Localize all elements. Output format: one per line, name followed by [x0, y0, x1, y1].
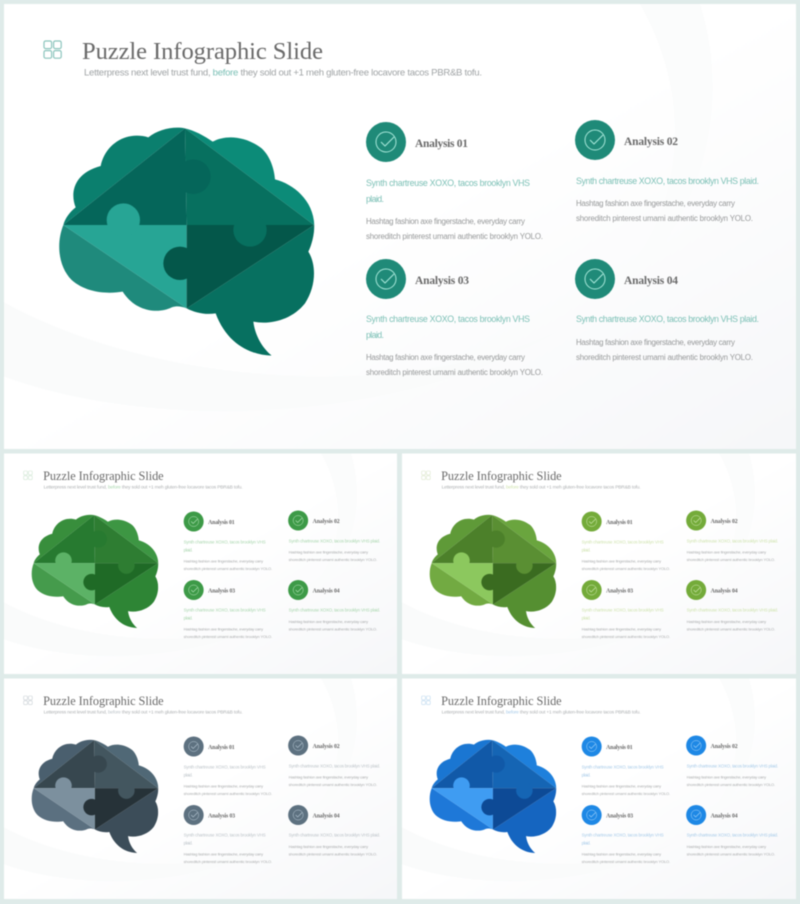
- item: analysis 03: plaid.: [582, 840, 591, 846]
- item: analysis 01: Synth chartreuse XOXO, tacos brooklyn VHS: [366, 178, 530, 188]
- item: analysis 03: Analysis 03: [606, 814, 633, 820]
- item: analysis 01: plaid.: [184, 548, 193, 552]
- icon: puzzle grid: [422, 696, 430, 705]
- item: analysis 02: Synth chartreuse XOXO, tacos brooklyn VHS plaid.: [687, 538, 778, 544]
- panel: dark slide: [1, 678, 397, 899]
- item: analysis 04: Analysis 04: [624, 275, 678, 287]
- brain puzzle graphic: [428, 739, 557, 854]
- item: analysis 01: Hashtag fashion axe fingerstache, everyday carry: [184, 784, 263, 788]
- item: analysis 03: [582, 580, 670, 639]
- item: analysis 03: Hashtag fashion axe fingerstache, everyday carry: [582, 626, 661, 632]
- item: analysis 04: Synth chartreuse XOXO, tacos brooklyn VHS plaid.: [687, 832, 778, 838]
- item: analysis 01: Synth chartreuse XOXO, tacos brooklyn VHS: [582, 540, 664, 544]
- item: analysis 04: Hashtag fashion axe fingerstache, everyday carry: [289, 844, 368, 849]
- item: analysis 03: [582, 805, 670, 864]
- item: analysis 04: Hashtag fashion axe fingerstache, everyday carry: [687, 844, 766, 849]
- item: analysis 01: shoreditch pinterest umami authentic brooklyn YOLO.: [366, 232, 543, 241]
- item: analysis 02: shoreditch pinterest umami authentic brooklyn YOLO.: [289, 557, 377, 562]
- item: analysis 02: Synth chartreuse XOXO, tacos brooklyn VHS plaid.: [289, 764, 380, 768]
- item: analysis 03: Analysis 03: [208, 588, 235, 594]
- item: analysis 01: Synth chartreuse XOXO, tacos brooklyn VHS: [184, 540, 266, 544]
- brain puzzle graphic: [58, 126, 315, 356]
- item: analysis 04: [288, 805, 380, 856]
- item: analysis 03: Synth chartreuse XOXO, tacos brooklyn VHS: [366, 314, 530, 324]
- item: analysis 02: Hashtag fashion axe fingerstache, everyday carry: [687, 774, 766, 780]
- item: analysis 02: Hashtag fashion axe fingerstache, everyday carry: [289, 550, 368, 554]
- item: analysis 02: shoreditch pinterest umami authentic brooklyn YOLO.: [687, 557, 775, 562]
- item: analysis 04: Analysis 04: [313, 814, 340, 820]
- item: analysis 03: [184, 580, 272, 639]
- item: analysis 01: Hashtag fashion axe fingerstache, everyday carry: [582, 784, 661, 788]
- item: analysis 03: Synth chartreuse XOXO, tacos brooklyn VHS: [184, 608, 266, 612]
- item: analysis 02: [575, 120, 759, 223]
- item: analysis 03: Hashtag fashion axe fingerstache, everyday carry: [366, 353, 525, 362]
- title: Puzzle Infographic Slide: [43, 694, 164, 708]
- item: analysis 02: Synth chartreuse XOXO, tacos brooklyn VHS plaid.: [576, 176, 759, 186]
- subtitle: Letterpress next level trust fund, before they sold out +1 meh gluten-free locavore tacos PBR&B tofu.: [44, 484, 243, 490]
- item: analysis 03: [366, 259, 543, 377]
- item: analysis 01: [582, 512, 670, 571]
- title: Puzzle Infographic Slide: [82, 38, 323, 65]
- item: analysis 03: Synth chartreuse XOXO, tacos brooklyn VHS: [582, 608, 664, 612]
- item: analysis 02: [288, 736, 380, 787]
- item: analysis 02: Analysis 02: [313, 519, 340, 525]
- item: analysis 01: [184, 736, 272, 796]
- item: analysis 04: [686, 805, 778, 856]
- item: analysis 02: Analysis 02: [711, 744, 738, 750]
- item: analysis 03: plaid.: [582, 616, 591, 620]
- panel: lime slide: [399, 452, 796, 674]
- item: analysis 01: [582, 736, 670, 796]
- item: analysis 01: Analysis 01: [415, 138, 468, 150]
- item: analysis 03: Analysis 03: [606, 588, 633, 594]
- brain puzzle graphic: [428, 514, 557, 629]
- item: analysis 01: plaid.: [582, 548, 591, 552]
- item: analysis 03: plaid.: [366, 330, 384, 340]
- item: analysis 04: Analysis 04: [711, 588, 738, 594]
- item: analysis 03: Analysis 03: [208, 814, 235, 820]
- item: analysis 02: shoreditch pinterest umami authentic brooklyn YOLO.: [289, 782, 377, 787]
- title: Puzzle Infographic Slide: [441, 469, 562, 483]
- item: analysis 01: Analysis 01: [606, 520, 633, 526]
- item: analysis 01: plaid.: [582, 772, 591, 778]
- title: Puzzle Infographic Slide: [43, 469, 164, 483]
- item: analysis 04: shoreditch pinterest umami authentic brooklyn YOLO.: [289, 626, 377, 632]
- item: analysis 01: Synth chartreuse XOXO, tacos brooklyn VHS: [184, 764, 266, 770]
- item: analysis 02: Analysis 02: [313, 744, 340, 750]
- item: analysis 03: Hashtag fashion axe fingerstache, everyday carry: [582, 852, 661, 856]
- title: Puzzle Infographic Slide: [441, 694, 562, 708]
- item: analysis 04: shoreditch pinterest umami authentic brooklyn YOLO.: [687, 626, 775, 632]
- item: analysis 03: Hashtag fashion axe fingerstache, everyday carry: [184, 626, 263, 632]
- subtitle: Letterpress next level trust fund, before they sold out +1 meh gluten-free locavore tacos PBR&B tofu.: [44, 709, 243, 715]
- item: analysis 03: Hashtag fashion axe fingerstache, everyday carry: [184, 852, 263, 856]
- item: analysis 02: Hashtag fashion axe fingerstache, everyday carry: [576, 199, 735, 208]
- item: analysis 02: Synth chartreuse XOXO, tacos brooklyn VHS plaid.: [687, 764, 778, 768]
- icon: puzzle grid: [422, 471, 430, 480]
- item: analysis 04: Analysis 04: [711, 814, 738, 820]
- item: analysis 03: shoreditch pinterest umami authentic brooklyn YOLO.: [582, 634, 670, 639]
- item: analysis 02: [686, 510, 778, 562]
- item: analysis 01: shoreditch pinterest umami authentic brooklyn YOLO.: [184, 566, 272, 571]
- item: analysis 01: Analysis 01: [208, 520, 235, 526]
- item: analysis 01: shoreditch pinterest umami authentic brooklyn YOLO.: [582, 566, 670, 571]
- item: analysis 04: shoreditch pinterest umami authentic brooklyn YOLO.: [289, 852, 377, 856]
- item: analysis 03: Synth chartreuse XOXO, tacos brooklyn VHS: [582, 832, 664, 838]
- item: analysis 02: Synth chartreuse XOXO, tacos brooklyn VHS plaid.: [289, 538, 380, 544]
- item: analysis 04: Hashtag fashion axe fingerstache, everyday carry: [289, 619, 368, 624]
- item: analysis 02: shoreditch pinterest umami authentic brooklyn YOLO.: [687, 782, 775, 787]
- item: analysis 03: shoreditch pinterest umami authentic brooklyn YOLO.: [184, 634, 272, 639]
- item: analysis 01: [184, 512, 272, 571]
- subtitle: Letterpress next level trust fund, before they sold out +1 meh gluten-free locavore tacos PBR&B tofu.: [84, 68, 482, 78]
- item: analysis 02: Analysis 02: [624, 136, 678, 148]
- item: analysis 04: Hashtag fashion axe fingerstache, everyday carry: [576, 338, 735, 347]
- icon: puzzle grid: [44, 41, 61, 58]
- item: analysis 01: [366, 122, 543, 241]
- item: analysis 04: [686, 580, 778, 632]
- item: analysis 03: [184, 805, 272, 864]
- item: analysis 03: shoreditch pinterest umami authentic brooklyn YOLO.: [582, 859, 670, 864]
- item: analysis 01: Analysis 01: [606, 745, 633, 751]
- item: analysis 04: Synth chartreuse XOXO, tacos brooklyn VHS plaid.: [687, 608, 778, 612]
- item: analysis 03: plaid.: [184, 840, 193, 846]
- item: analysis 03: shoreditch pinterest umami authentic brooklyn YOLO.: [366, 368, 543, 377]
- item: analysis 04: Analysis 04: [313, 588, 340, 594]
- item: analysis 03: Synth chartreuse XOXO, tacos brooklyn VHS: [184, 832, 266, 838]
- item: analysis 01: plaid.: [366, 194, 384, 204]
- item: analysis 02: [288, 510, 380, 562]
- item: analysis 01: Hashtag fashion axe fingerstache, everyday carry: [184, 558, 263, 564]
- item: analysis 04: Synth chartreuse XOXO, tacos brooklyn VHS plaid.: [289, 832, 380, 838]
- item: analysis 02: [686, 736, 778, 787]
- item: analysis 04: Synth chartreuse XOXO, tacos brooklyn VHS plaid.: [289, 608, 380, 612]
- brain puzzle graphic: [30, 514, 159, 629]
- subtitle: Letterpress next level trust fund, before they sold out +1 meh gluten-free locavore tacos PBR&B tofu.: [442, 484, 641, 490]
- item: analysis 02: Hashtag fashion axe fingerstache, everyday carry: [289, 774, 368, 780]
- item: analysis 01: Hashtag fashion axe fingerstache, everyday carry: [582, 558, 661, 564]
- panel: teal slide: [0, 4, 796, 449]
- item: analysis 04: [575, 259, 759, 362]
- panel: blue slide: [399, 678, 796, 899]
- subtitle: Letterpress next level trust fund, before they sold out +1 meh gluten-free locavore tacos PBR&B tofu.: [442, 709, 641, 715]
- panel: green slide: [1, 452, 397, 674]
- icon: puzzle grid: [24, 696, 32, 705]
- item: analysis 03: plaid.: [184, 616, 193, 620]
- item: analysis 01: plaid.: [184, 772, 193, 778]
- brain puzzle graphic: [31, 739, 159, 854]
- item: analysis 04: Hashtag fashion axe fingerstache, everyday carry: [687, 619, 766, 624]
- item: analysis 04: shoreditch pinterest umami authentic brooklyn YOLO.: [687, 852, 775, 856]
- item: analysis 04: shoreditch pinterest umami authentic brooklyn YOLO.: [576, 353, 753, 362]
- item: analysis 03: Analysis 03: [415, 275, 469, 287]
- item: analysis 01: shoreditch pinterest umami authentic brooklyn YOLO.: [184, 791, 272, 796]
- item: analysis 01: shoreditch pinterest umami authentic brooklyn YOLO.: [582, 791, 670, 796]
- item: analysis 02: Hashtag fashion axe fingerstache, everyday carry: [687, 550, 766, 554]
- item: analysis 01: Analysis 01: [208, 745, 235, 751]
- item: analysis 04: Synth chartreuse XOXO, tacos brooklyn VHS plaid.: [576, 314, 759, 324]
- item: analysis 03: shoreditch pinterest umami authentic brooklyn YOLO.: [184, 859, 272, 864]
- item: analysis 01: Hashtag fashion axe fingerstache, everyday carry: [366, 217, 525, 226]
- item: analysis 02: Analysis 02: [711, 519, 738, 525]
- item: analysis 01: Synth chartreuse XOXO, tacos brooklyn VHS: [582, 764, 664, 770]
- item: analysis 04: [288, 580, 380, 632]
- icon: puzzle grid: [24, 471, 32, 480]
- item: analysis 02: shoreditch pinterest umami authentic brooklyn YOLO.: [576, 214, 753, 223]
